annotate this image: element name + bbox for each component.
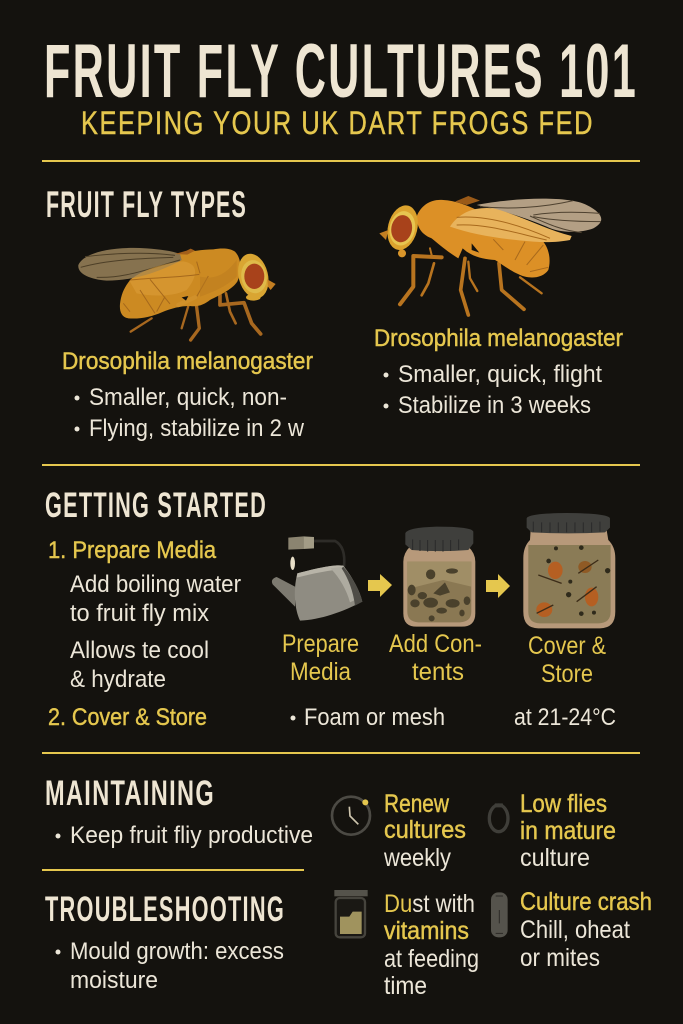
panel: troubleshooting xyxy=(45,890,285,994)
bullet: keep productive: Keep fruit fliy productive xyxy=(70,822,313,849)
arrow: jar to covered jar xyxy=(486,574,510,598)
tip: renew cultures xyxy=(383,790,466,872)
step 1 text: 1. Prepare Media xyxy=(48,537,217,564)
tip: culture crash: Culture crash xyxy=(520,888,652,916)
note: foam or mesh: Foam or mesh xyxy=(304,704,445,731)
tip: dust with vitamins xyxy=(384,890,479,1000)
icon: kettle xyxy=(272,536,362,621)
heading: troubleshooting: TROUBLESHOOTING xyxy=(45,890,285,929)
tip: culture crash: Chill, oheat xyxy=(520,916,630,944)
panel: getting started xyxy=(45,486,616,731)
caption: cover and store: Store xyxy=(541,660,593,688)
list: left fly traits: Smaller, quick, non- xyxy=(89,384,287,411)
caption: add contents: Add Con- xyxy=(389,630,482,658)
icon: covered jar with flies xyxy=(523,513,615,628)
step 1 text: Allows te cool xyxy=(70,637,209,664)
list: left fly traits: Flying, stabilize in 2 w xyxy=(89,415,305,442)
label: left species name: Drosophila melanogaster xyxy=(62,348,313,375)
tip: dust with vitamins: vitamins xyxy=(384,917,469,945)
tip: renew cultures: cultures xyxy=(384,816,466,844)
panel: maintaining xyxy=(45,774,313,849)
bullet: mould growth xyxy=(56,938,284,994)
tip: low flies: culture xyxy=(520,844,590,872)
arrow: kettle to jar xyxy=(368,574,392,597)
step 1 text: to fruit fly mix xyxy=(70,600,209,627)
tip: culture crash xyxy=(520,888,652,972)
tip: low flies: in mature xyxy=(520,817,616,845)
caption: prepare media: Prepare xyxy=(282,630,359,658)
panel: tips grid xyxy=(332,790,652,1000)
list: left fly traits xyxy=(74,384,305,442)
icon: ring xyxy=(489,803,508,832)
bullet: mould growth: Mould growth: excess xyxy=(70,938,284,965)
icon: vitamin jar xyxy=(334,890,368,937)
panel: fruit fly types xyxy=(46,184,623,442)
icon: clock xyxy=(332,797,370,835)
heading: fruit fly types: FRUIT FLY TYPES xyxy=(46,184,247,225)
icon: jar with media xyxy=(403,527,475,627)
step 2 text: 2. Cover & Store xyxy=(48,704,207,731)
icon: culture tube xyxy=(491,892,508,937)
caption: cover and store: Cover & xyxy=(528,632,606,660)
step 1 text xyxy=(48,537,241,693)
caption: add contents: tents xyxy=(412,658,464,686)
tip: renew cultures: weekly xyxy=(383,844,451,872)
list: right fly traits: Stabilize in 3 weeks xyxy=(398,392,591,419)
heading: maintaining: MAINTAINING xyxy=(45,774,215,813)
note: temperature: at 21-24°C xyxy=(514,704,616,731)
caption: add contents xyxy=(389,630,482,686)
label: right species name: Drosophila melanogaster xyxy=(374,325,623,352)
tip: dust with vitamins: at feeding xyxy=(384,945,479,973)
caption: cover and store xyxy=(528,632,606,688)
tip: culture crash: or mites xyxy=(520,944,600,972)
list: right fly traits: Smaller, quick, flight xyxy=(398,361,602,388)
bullet: mould growth: moisture xyxy=(70,967,158,994)
illustration: left fruit fly xyxy=(78,248,276,340)
tip: low flies xyxy=(520,790,616,872)
heading: getting started: GETTING STARTED xyxy=(45,486,267,525)
tip: dust with vitamins: time xyxy=(384,972,427,1000)
illustration: right fruit fly xyxy=(379,196,601,315)
caption: prepare media: Media xyxy=(290,658,351,686)
tip: low flies: Low flies xyxy=(520,790,607,818)
tip: renew cultures: Renew xyxy=(384,790,450,818)
caption: prepare media xyxy=(282,630,359,686)
step 1 text: & hydrate xyxy=(70,666,166,693)
step 1 text: Add boiling water xyxy=(70,571,241,598)
tip: dust with vitamins: Dust with xyxy=(384,890,475,918)
list: right fly traits xyxy=(384,361,602,419)
